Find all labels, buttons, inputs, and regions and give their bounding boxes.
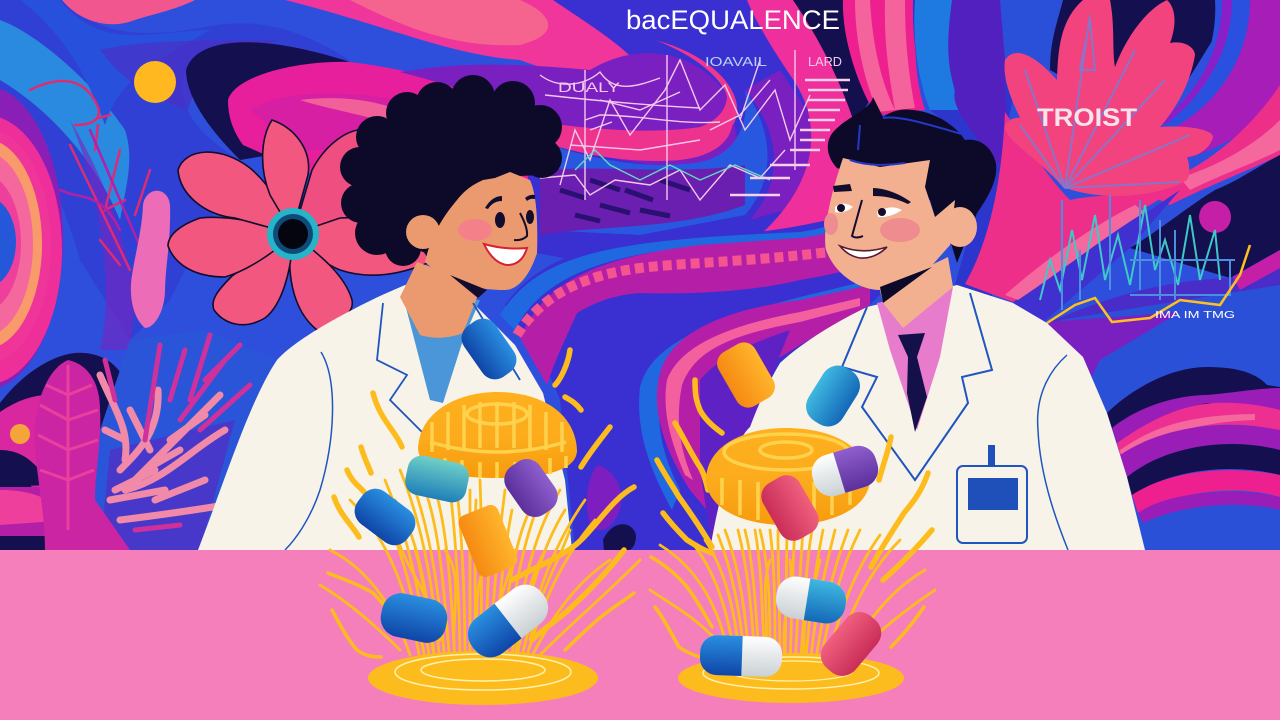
hair highlights [850, 117, 965, 165]
hair back [828, 97, 996, 263]
neck [400, 262, 482, 338]
shirt [877, 287, 953, 430]
fountain: left gold capsule dome [418, 392, 577, 478]
blush [880, 218, 920, 242]
plant: pink coral [100, 335, 250, 530]
swirl: lower right bands [1047, 285, 1280, 550]
chart label: small right: IMA IM TMG [1155, 310, 1235, 321]
flower: large pink flower with blue eye [168, 120, 430, 330]
blush [458, 219, 492, 241]
smile [484, 244, 527, 265]
capsule: purple [498, 453, 564, 523]
chart label: left: DUALY [558, 79, 621, 95]
capsule: blue and white lower [699, 635, 783, 677]
plant: magenta fern [35, 360, 130, 550]
heading: bioequivalence hand lettering: bacEQUALENCE [626, 5, 840, 35]
scientist: woman [198, 75, 572, 550]
capsule: blue left [348, 482, 422, 552]
ear [943, 207, 977, 247]
nose [852, 200, 863, 238]
capsule: red upper [756, 470, 824, 546]
shirt [403, 296, 480, 403]
plant: red branching lines [30, 81, 150, 270]
swirl: top left pink blob [62, 0, 195, 24]
capsule: teal [403, 453, 471, 505]
hair [340, 75, 562, 266]
decorative circle: magenta [1199, 201, 1231, 233]
swirl: top right pink fan [747, 0, 925, 290]
swirl: left rainbow arc [0, 86, 63, 390]
tie [898, 333, 927, 432]
swirl: upper right blue and purple [913, 0, 1070, 320]
flower: right fan flower [1004, 0, 1213, 196]
eyes and brows [833, 184, 911, 217]
capsule: orange upper [712, 338, 780, 412]
table [0, 550, 1280, 720]
fountain: right gold capsule dome [706, 428, 870, 525]
capsule: white and blue [773, 574, 849, 626]
chart label: middle: IOAVAIL [705, 54, 767, 69]
lapels [377, 303, 520, 440]
coat [198, 285, 572, 550]
swirl: purple hatch band [540, 165, 745, 235]
chart scribble: right spectrum [1040, 195, 1250, 323]
coat [710, 285, 1145, 550]
gold streams: right burst [650, 380, 935, 668]
gold puddle: left [368, 651, 598, 705]
swirl: top left blue field [0, 0, 350, 350]
decorative circle: yellow sun [134, 61, 176, 103]
swirl: centre stripes between scientists [500, 205, 880, 550]
capsule: red lower [814, 605, 888, 683]
sleeve seam [1038, 355, 1068, 550]
magenta dashes along the band [517, 248, 860, 335]
scientist: man [710, 97, 1145, 550]
flower petals [168, 120, 430, 330]
gold streams: left burst [320, 350, 640, 668]
neck [880, 257, 953, 328]
plant: pink tube [131, 191, 170, 328]
capsule: blue upper [456, 313, 522, 385]
gold puddle: right [678, 653, 904, 703]
capsule: blue lower [377, 590, 451, 646]
capsule: blue and white [460, 577, 556, 665]
swirl: navy crescent [186, 42, 430, 160]
eyes and brows [485, 195, 535, 228]
swirl: top centre pink [285, 0, 640, 75]
swirl: pink inner field [228, 62, 660, 250]
smile [840, 246, 887, 258]
coat seam [285, 352, 333, 550]
swirl: purple chart panel [400, 0, 855, 300]
swirl: right navy and bands [965, 0, 1280, 345]
face [425, 172, 537, 290]
ear [406, 215, 440, 249]
swirl: lower left bands [0, 330, 277, 550]
capsule: white and purple [807, 441, 883, 501]
flower eye [267, 208, 319, 260]
chart scribble: bioequivalence graph [540, 50, 850, 200]
flower label: trust: TROIST [1037, 104, 1137, 132]
chart label: right: LARD [808, 54, 842, 69]
chin shadow [880, 267, 932, 303]
fan petals [1004, 0, 1213, 196]
capsule: blue upper right [800, 359, 866, 433]
lapels [842, 293, 992, 480]
chin shadow [450, 275, 487, 298]
face [825, 158, 955, 290]
pocket badge [957, 445, 1027, 543]
blush left [824, 213, 838, 235]
decorative circle: small orange dot [10, 424, 30, 444]
fan veins [1020, 15, 1190, 188]
nose [514, 213, 527, 240]
capsule: orange [456, 503, 520, 579]
